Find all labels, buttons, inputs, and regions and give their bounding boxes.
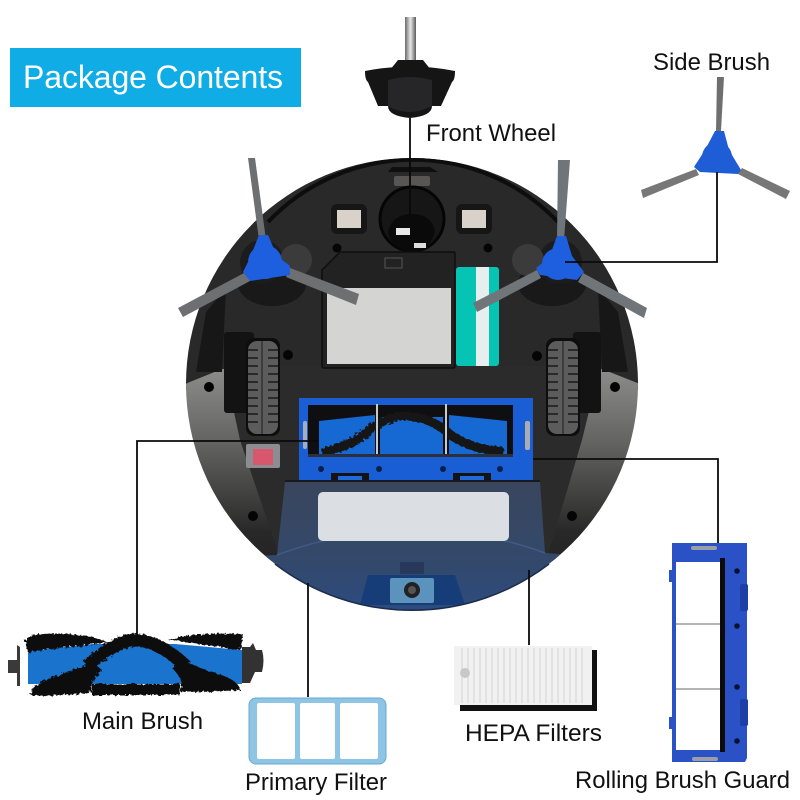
label: main brush: Main Brush [82,708,203,735]
label: side brush: Side Brush [653,49,770,76]
icon: left side brush on robot [178,158,359,317]
label: front wheel: Front Wheel [426,120,556,147]
title banner [10,48,301,107]
rear caster [360,575,465,605]
caster well [380,187,444,251]
left wheel [224,332,254,413]
inner dark body [234,369,588,516]
label: primary filter: Primary Filter [245,769,387,796]
sensor pads [334,207,364,231]
label: HEPA filters: HEPA Filters [465,720,602,747]
robot vacuum underside [180,150,645,620]
brush guard in robot [299,398,533,482]
teal sticker [456,267,499,366]
icon: rolling brush guard [669,543,748,762]
right wheel [573,332,601,413]
icon: right side brush on robot [473,160,647,318]
bumper rim groove [268,160,558,222]
brush motor wells [238,273,306,306]
centre label panel [322,252,455,368]
upper shell [180,150,645,390]
screw holes [332,244,342,252]
icon: front wheel [365,17,455,118]
lower shell [186,369,638,564]
dustbin [265,482,561,610]
connector lines [137,118,718,697]
icon: standalone side brush [641,77,790,199]
power switch [246,444,280,468]
side bumper pieces [196,288,226,372]
dustbin label [318,492,509,541]
icon: primary filter [249,698,386,764]
label: rolling brush guard: Rolling Brush Guard [575,767,790,794]
icon: main brush [8,634,264,696]
icon: HEPA filter [454,646,597,711]
title banner: Package Contents [23,59,283,95]
